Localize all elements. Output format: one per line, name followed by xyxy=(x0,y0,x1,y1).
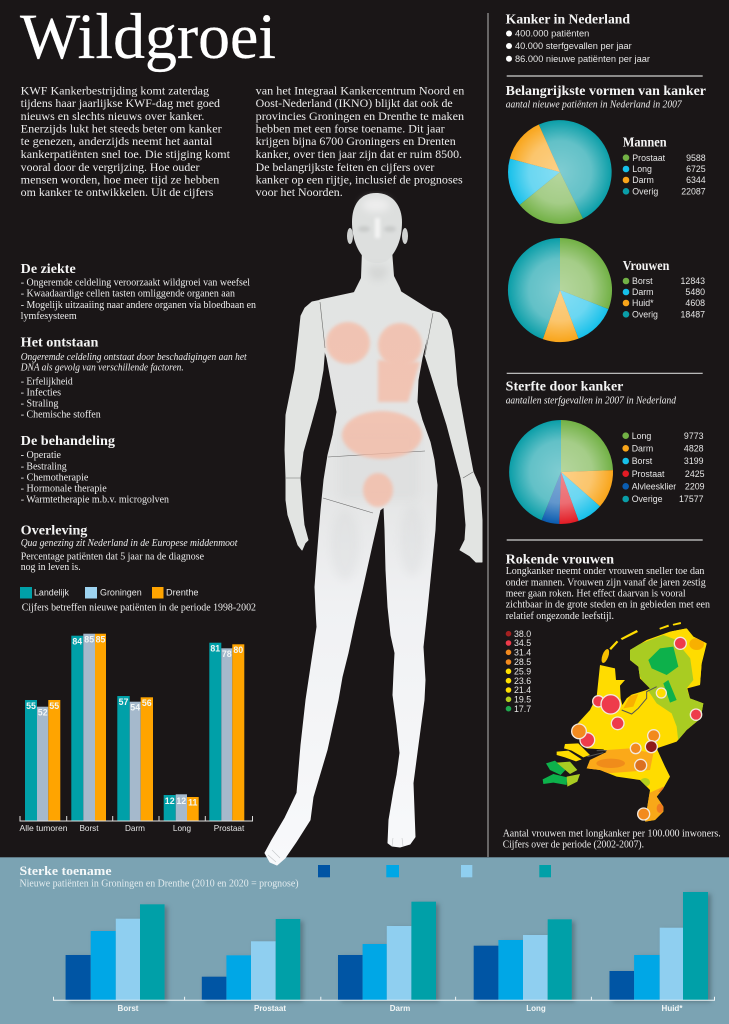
bars: Prostaat: 78 xyxy=(222,649,232,659)
bars: Prostaat: 80 xyxy=(233,645,243,655)
heading: Sterfte door kanker: aantallen sterfgevallen in 2007 in Nederland xyxy=(506,395,677,406)
mannequin shading xyxy=(331,430,424,580)
legend: Vrouwen: 5480 xyxy=(685,287,705,297)
section: Het ontstaan: DNA als gevolg van verschillende factoren. xyxy=(20,363,184,374)
section: Rokende vrouwen xyxy=(506,551,710,622)
section: De behandeling: - Warmtetherapie m.b.v. microgolven xyxy=(21,494,169,505)
legend: Mannen: 6344 xyxy=(686,175,706,185)
legend: Mannen xyxy=(623,135,706,196)
section: Overleving xyxy=(21,522,238,573)
section: Overleving: nog in leven is. xyxy=(21,562,81,573)
axis labels: Long xyxy=(173,824,192,833)
panel: Sterke toename xyxy=(0,857,729,1024)
map caption: Aantal vrouwen met longkanker per 100.000 inwoners. xyxy=(503,829,721,840)
legend: Sterfte: 2209 xyxy=(685,481,705,491)
legend: Vrouwen: 12843 xyxy=(681,276,705,286)
intro text column 2: kanker, over tien jaar zijn dat er ruim 8500. xyxy=(256,149,462,161)
bars: Darm: 54 xyxy=(130,702,140,712)
map legend: 21.4 xyxy=(514,685,531,695)
axis labels: Borst xyxy=(79,824,99,833)
bars: Prostaat xyxy=(209,643,244,821)
legend: Vrouwen: 4608 xyxy=(685,298,705,308)
legend: Vrouwen xyxy=(623,258,705,319)
bars: Alle tumoren: 52 xyxy=(38,708,48,718)
section: De behandeling: De behandeling xyxy=(21,433,115,448)
intro text column 1: Enerzijds lukt het steeds beter om kanker xyxy=(21,124,222,136)
map legend xyxy=(506,629,531,714)
map legend: 23.6 xyxy=(514,676,531,686)
section: Overleving: Percentage patiënten dat 5 jaar na de diagnose xyxy=(21,551,205,562)
axis labels: Darm xyxy=(125,824,145,833)
pie chart: Vrouwen xyxy=(508,238,612,342)
legend: Vrouwen: Darm xyxy=(632,287,654,297)
intro text column 2: krijgen bijna 6700 Groningers en Drenten xyxy=(256,136,456,148)
legend: survival chart: Groningen xyxy=(100,588,142,598)
legend: Mannen: Mannen xyxy=(623,135,667,150)
pie chart: Mannen xyxy=(508,120,612,224)
bar chart: survival xyxy=(20,634,252,833)
intro text column 2: van het Integraal Kankercentrum Noord en xyxy=(256,85,465,97)
section: Het ontstaan: - Straling xyxy=(21,399,58,410)
map caption xyxy=(503,829,721,851)
intro text column 1: vooral door de vergrijzing. Hoe ouder xyxy=(21,162,200,174)
intro text column 1: te genezen, anderzijds neemt het aantal xyxy=(21,136,212,148)
axis labels: Alle tumoren xyxy=(20,824,68,833)
bars: Prostaat xyxy=(202,919,300,1000)
legend: Sterfte: Darm xyxy=(632,443,653,453)
title: Wildgroei xyxy=(20,1,276,73)
section: De ziekte: - Ongeremde celdeling veroorzaakt wildgroei van weefsel xyxy=(21,278,250,289)
section: Kanker in Nederland: Kanker in Nederland xyxy=(506,11,630,26)
legend: Sterfte: Alvleesklier xyxy=(632,481,676,491)
map: Netherlands xyxy=(543,622,713,827)
legend: Vrouwen: Borst xyxy=(632,276,653,286)
section: Rokende vrouwen: relatief ongezonde leefstijl. xyxy=(506,611,614,622)
bars: Prostaat: 81 xyxy=(210,644,220,654)
section: Het ontstaan: - Erfelijkheid xyxy=(21,376,73,387)
heading: Belangrijkste vormen van kanker: aantal nieuwe patiënten in Nederland in 2007 xyxy=(506,99,683,110)
axis labels xyxy=(20,824,245,833)
Zeeland xyxy=(543,743,590,787)
legend: Sterfte: 2425 xyxy=(685,469,705,479)
axis labels: Huid* xyxy=(662,1004,683,1013)
bars: Borst xyxy=(66,904,165,1000)
heading: Sterke toename: Sterke toename xyxy=(20,864,112,878)
legend: Vrouwen: 18487 xyxy=(681,309,705,319)
bars: Long xyxy=(474,919,572,1000)
section: De ziekte: - Kwaadaardige cellen tasten omliggende organen aan xyxy=(21,289,235,300)
section: Kanker in Nederland xyxy=(506,11,650,64)
subtitle: Nieuwe patiënten in Groningen en Drenthe (2010 en 2020 = prognose) xyxy=(20,879,299,890)
axis labels: Prostaat xyxy=(214,824,245,833)
section: De behandeling: - Bestraling xyxy=(21,461,67,472)
map legend: 17.7 xyxy=(514,704,531,714)
bars: Long: 12 xyxy=(176,796,186,806)
bars: Huid xyxy=(610,892,708,1000)
panel divider xyxy=(487,13,489,857)
mannequin xyxy=(265,193,482,865)
bars: Darm xyxy=(338,902,436,1000)
city circles xyxy=(572,637,702,820)
legend: Mannen: 9588 xyxy=(686,153,706,163)
bars: Long: 11 xyxy=(188,798,198,808)
legend: Sterfte: 9773 xyxy=(684,431,704,441)
section: Rokende vrouwen: meer gaan roken. Het effect daarvan is vooral xyxy=(506,589,686,600)
legend: Sterfte: 3199 xyxy=(684,456,704,466)
bars: Borst: 85 xyxy=(84,634,94,644)
section: Rokende vrouwen: onder mannen. Vrouwen zijn vanaf de jaren zestig xyxy=(506,577,706,588)
map legend: 31.4 xyxy=(514,647,531,657)
section: Kanker in Nederland: 40.000 sterfgevallen per jaar xyxy=(515,41,632,51)
legend: Mannen: Overig xyxy=(632,186,658,196)
bars: Darm: 56 xyxy=(142,698,152,708)
intro text column 2: provincies Groningen en Drenthe te maken xyxy=(256,111,464,123)
intro text column 1: KWF Kankerbestrijding komt zaterdag xyxy=(21,85,209,97)
bars: Alle tumoren: 55 xyxy=(49,701,59,711)
map legend: 34.5 xyxy=(514,638,531,648)
map caption: Cijfers over de periode (2002-2007). xyxy=(503,840,644,851)
axis labels xyxy=(118,1004,683,1013)
legend: Mannen: 6725 xyxy=(686,164,706,174)
bars: Alle tumoren: 55 xyxy=(26,701,36,711)
map legend: 25.9 xyxy=(514,666,531,676)
bars: Borst: 85 xyxy=(96,634,105,644)
bars: Alle tumoren xyxy=(25,700,60,821)
pie chart: Sterfte xyxy=(509,420,613,524)
intro text column 2: De belangrijkste feiten en cijfers over xyxy=(256,162,435,174)
legend: Mannen: Darm xyxy=(632,175,654,185)
heading: Sterfte door kanker: Sterfte door kanker xyxy=(506,379,623,394)
section: De ziekte: De ziekte xyxy=(21,261,76,276)
bars: Long xyxy=(164,794,199,821)
intro text column 2 xyxy=(256,85,465,199)
legend: survival chart xyxy=(20,587,199,598)
intro text column 1 xyxy=(21,85,231,199)
face shading xyxy=(358,198,396,281)
heading: Belangrijkste vormen van kanker xyxy=(506,83,706,110)
section: Rokende vrouwen: Longkanker neemt onder vrouwen sneller toe dan xyxy=(506,566,704,577)
highlighted cancer zones xyxy=(326,322,422,507)
map legend: 28.5 xyxy=(514,657,531,667)
legend: Sterfte: Prostaat xyxy=(632,469,665,479)
legend: Sterfte xyxy=(622,431,705,504)
section: De behandeling: - Operatie xyxy=(21,450,62,461)
intro text column 1: om kanker te ontwikkelen. Uit de cijfers xyxy=(21,187,214,199)
section: Overleving: Overleving xyxy=(21,522,88,537)
section: De ziekte: lymfesysteem xyxy=(21,311,77,322)
legend: Sterfte: Overige xyxy=(632,494,663,504)
axis labels: Darm xyxy=(390,1004,410,1013)
section: De behandeling: - Chemotherapie xyxy=(21,472,89,483)
legend: Vrouwen: Overig xyxy=(632,309,658,319)
section: Het ontstaan: - Chemische stoffen xyxy=(21,410,101,421)
bars: Darm xyxy=(117,696,153,821)
axis labels: Borst xyxy=(118,1004,139,1013)
legend: survival chart: Drenthe xyxy=(166,588,199,598)
section: Het ontstaan xyxy=(20,335,247,421)
section: Rokende vrouwen: Rokende vrouwen xyxy=(506,551,615,566)
legend: Sterfte: 4828 xyxy=(684,443,704,453)
legend: Vrouwen: Vrouwen xyxy=(623,258,670,273)
legend squares xyxy=(318,865,551,877)
section: Het ontstaan: - Infecties xyxy=(21,387,61,398)
mannequin body xyxy=(265,193,482,865)
axis labels: Long xyxy=(526,1004,546,1013)
waterways xyxy=(587,687,657,757)
intro text column 1: nieuws en slechts nieuws over kanker. xyxy=(21,111,205,123)
intro text column 2: kanker op een rijtje, inclusief de prognoses xyxy=(256,174,463,186)
section: Overleving: Qua genezing zit Nederland in de Europese middenmoot xyxy=(21,538,238,549)
intro text column 1: tijdens haar jaarlijkse KWF-dag met goed xyxy=(21,98,220,110)
chart note: Cijfers betreffen nieuwe patiënten in de periode 1998-2002 xyxy=(22,603,256,614)
section: Kanker in Nederland: 86.000 nieuwe patiënten per jaar xyxy=(515,54,650,64)
legend: Mannen: Long xyxy=(632,164,652,174)
legend: Sterfte: Long xyxy=(632,431,651,441)
section: Het ontstaan: Het ontstaan xyxy=(21,335,99,350)
map regions xyxy=(578,628,707,822)
map legend: 38.0 xyxy=(514,629,531,639)
intro text column 1: kankerpatiënten snel toe. Die stijging komt xyxy=(21,149,231,161)
section: De behandeling: - Hormonale therapie xyxy=(21,483,107,494)
legend: survival chart: Landelijk xyxy=(34,588,70,598)
intro text column 2: voor het Noorden. xyxy=(256,187,343,199)
intro text column 1: mensen worden, hoe meer tijd ze hebben xyxy=(21,174,220,186)
intro text column 2: hebben met een forse toename. Dit jaar xyxy=(256,124,445,136)
map legend: 19.5 xyxy=(514,694,531,704)
legend: Mannen: Prostaat xyxy=(632,153,666,163)
heading: Sterfte door kanker xyxy=(506,379,677,406)
intro text column 2: Oost-Nederland (IKNO) blijkt dat ook de xyxy=(256,98,453,110)
legend: Mannen: 22087 xyxy=(681,186,706,196)
legend: Sterfte: Borst xyxy=(632,456,653,466)
legend: Vrouwen: Huid* xyxy=(632,298,654,308)
section: Het ontstaan: Ongeremde celdeling ontstaat door beschadigingen aan het xyxy=(21,352,247,363)
axis labels: Prostaat xyxy=(254,1004,286,1013)
section: De ziekte: - Mogelijk uitzaaiing naar andere organen via bloedbaan en xyxy=(21,300,256,311)
islands xyxy=(600,622,681,664)
bars: Borst: 84 xyxy=(72,636,82,646)
legend: Sterfte: 17577 xyxy=(679,494,704,504)
heading: Belangrijkste vormen van kanker: Belangrijkste vormen van kanker xyxy=(506,83,706,98)
section: De ziekte xyxy=(21,261,256,322)
bars: Borst xyxy=(71,634,106,821)
bars: Darm: 57 xyxy=(119,697,128,707)
bars: Long: 12 xyxy=(165,796,175,806)
section: De behandeling xyxy=(21,433,169,505)
section: Rokende vrouwen: zichtbaar in de grote steden en in gebieden met een xyxy=(506,600,710,611)
section: Kanker in Nederland: 400.000 patiënten xyxy=(515,29,589,39)
